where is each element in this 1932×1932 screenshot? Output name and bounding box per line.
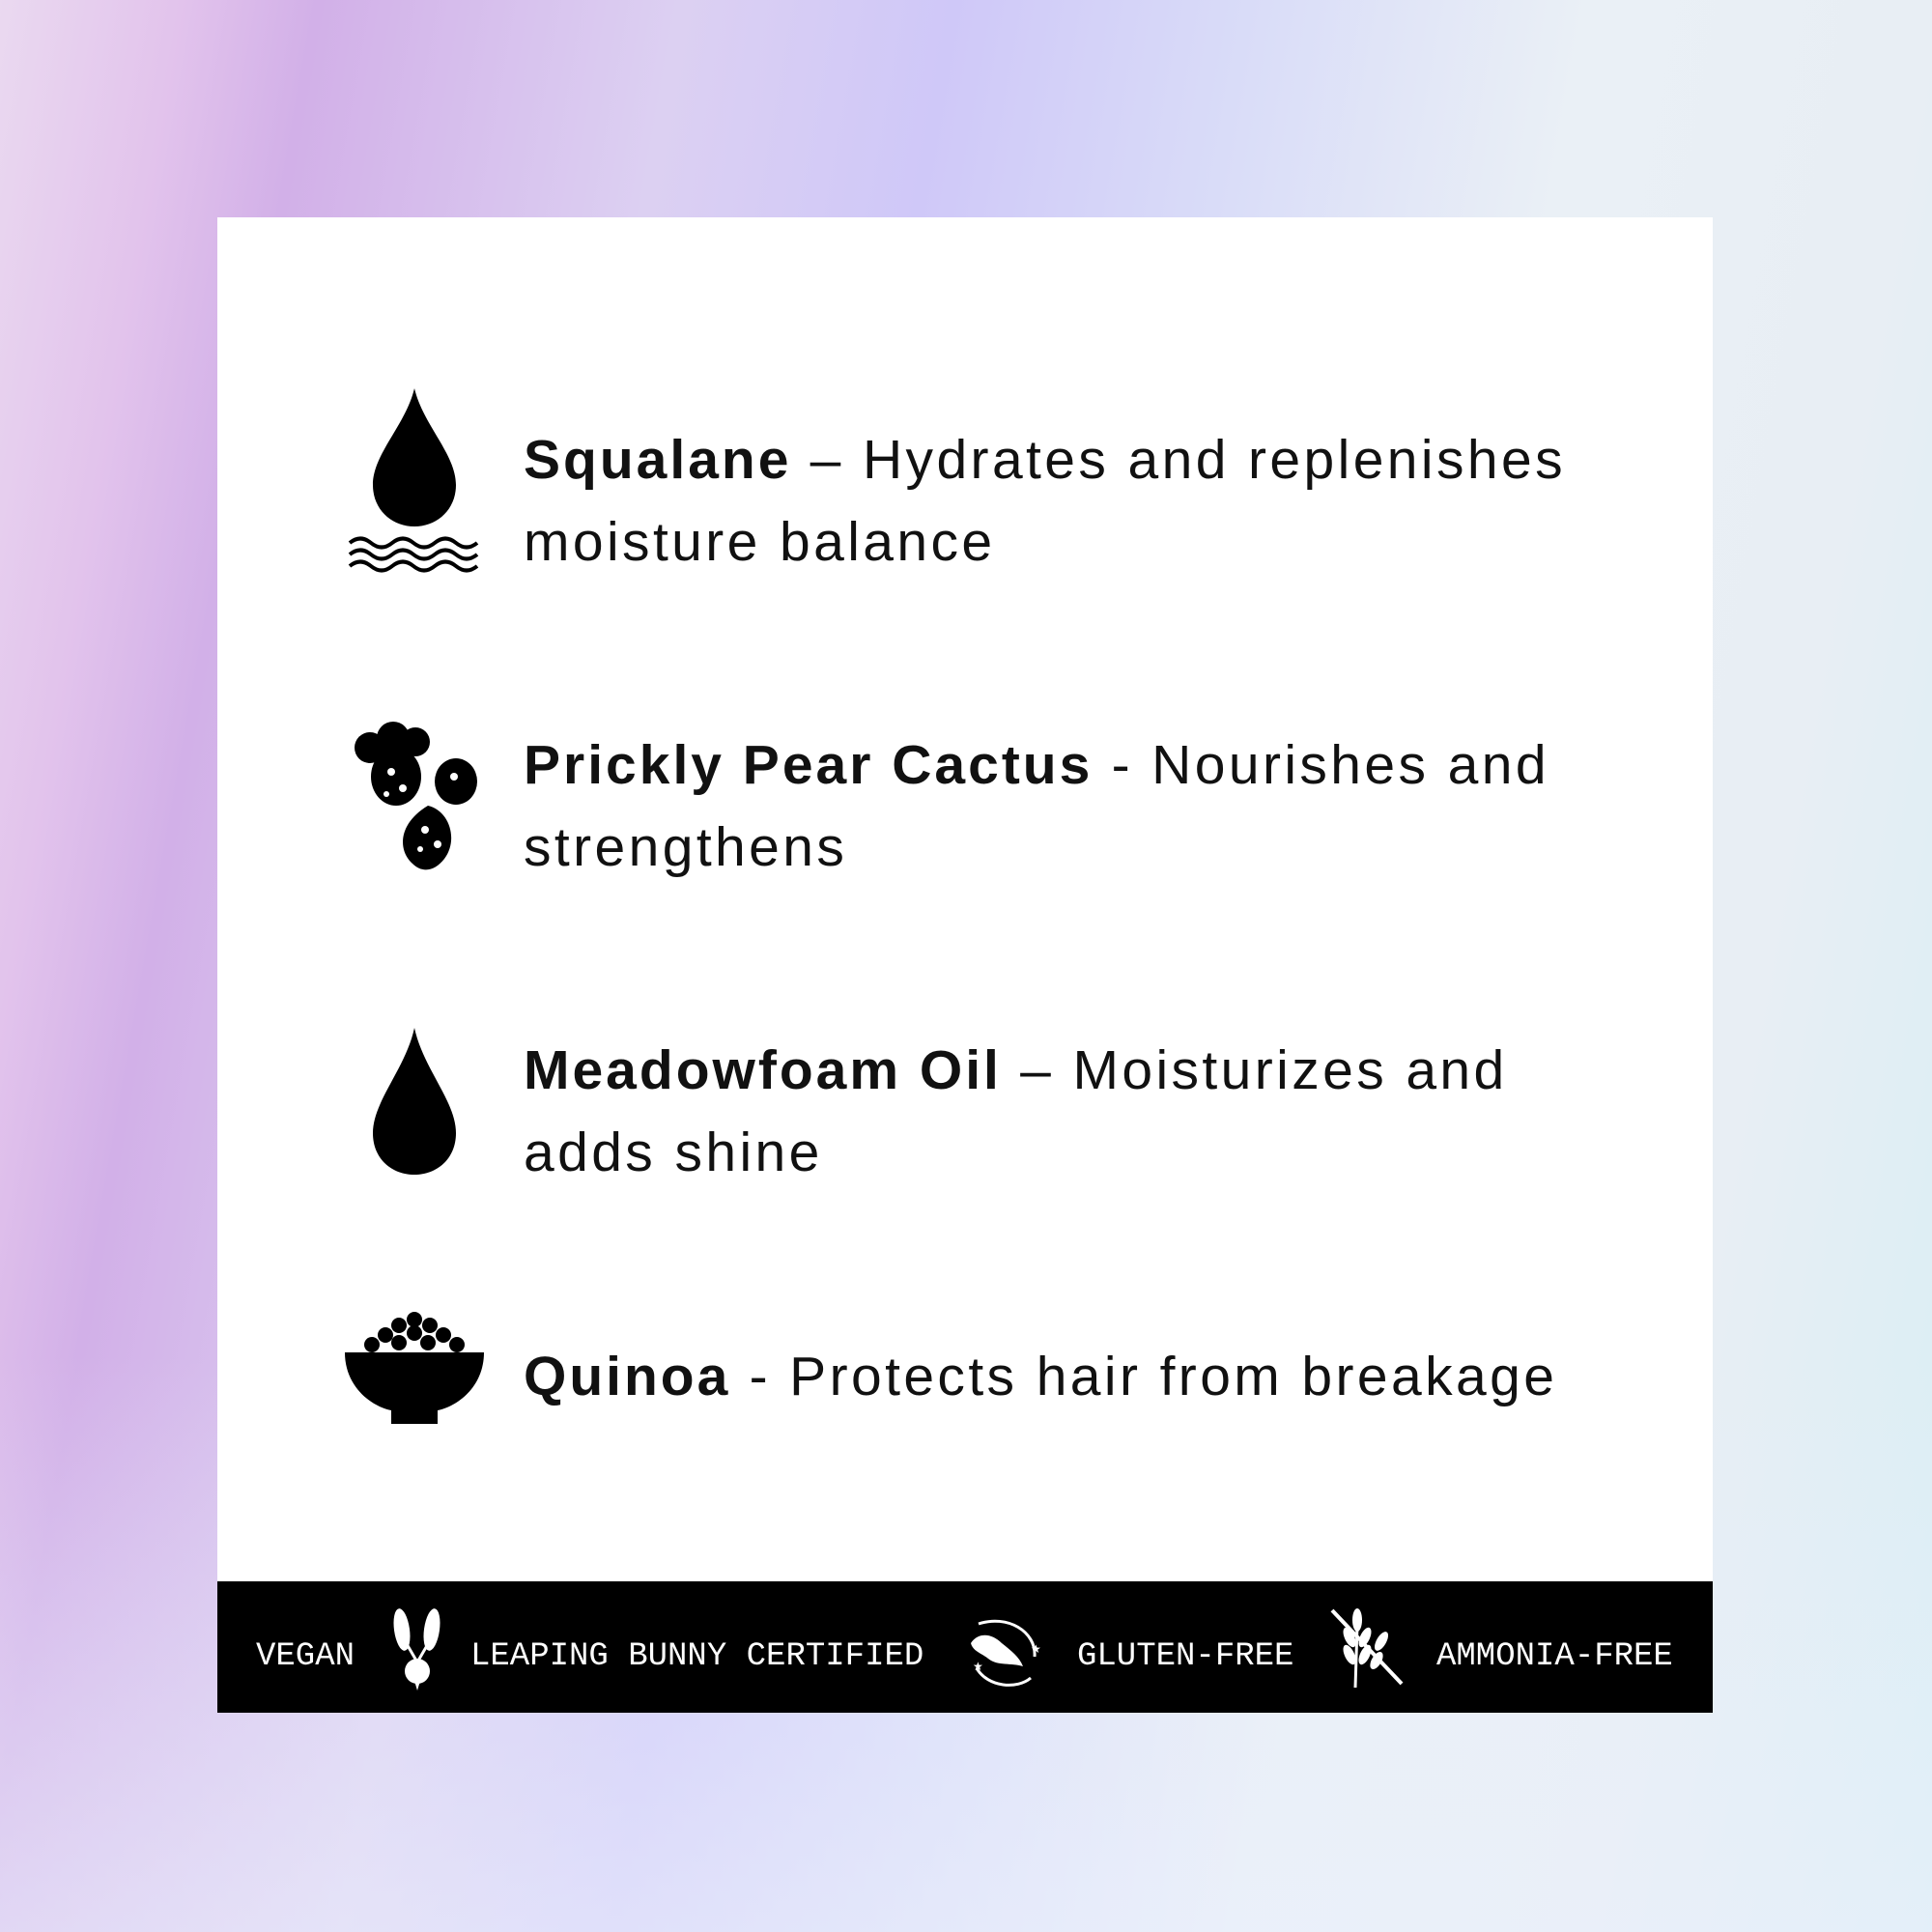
text: meadowfoam: Meadowfoam Oil – Moisturizes and: [524, 1039, 1508, 1101]
icon: bunny: ★: [1031, 1642, 1041, 1656]
badge: leaping bunny: LEAPING BUNNY CERTIFIED: [470, 1638, 923, 1675]
text: squalane: [524, 429, 1566, 573]
text: prickly pear: strengthens: [524, 816, 847, 878]
icon: bunny: [971, 1619, 1041, 1687]
text: squalane: moisture balance: [524, 511, 995, 573]
icon: crossed wheat: [1331, 1608, 1403, 1688]
badge: vegan: VEGAN: [256, 1638, 355, 1675]
text: quinoa: Quinoa - Protects hair from breakage: [524, 1346, 1557, 1407]
icon: drop: [373, 1028, 456, 1175]
text: prickly pear: [524, 734, 1549, 878]
badge: gluten-free: GLUTEN-FREE: [1077, 1638, 1293, 1675]
icon: cactus: [355, 722, 477, 869]
text: meadowfoam: adds shine: [524, 1122, 823, 1183]
badge: ammonia-free: AMMONIA-FREE: [1436, 1638, 1673, 1675]
badge bar: [217, 1581, 1713, 1713]
text: squalane: Squalane – Hydrates and replenishes: [524, 429, 1566, 491]
icon: quinoa bowl: [345, 1312, 484, 1424]
card: [217, 217, 1713, 1713]
icon: bunny: ★: [973, 1660, 983, 1673]
icon: radish: [394, 1608, 440, 1690]
icon: drop with waves: [348, 388, 479, 573]
text: prickly pear: Prickly Pear Cactus - Nourishes and: [524, 734, 1549, 796]
text: meadowfoam: [524, 1039, 1508, 1183]
